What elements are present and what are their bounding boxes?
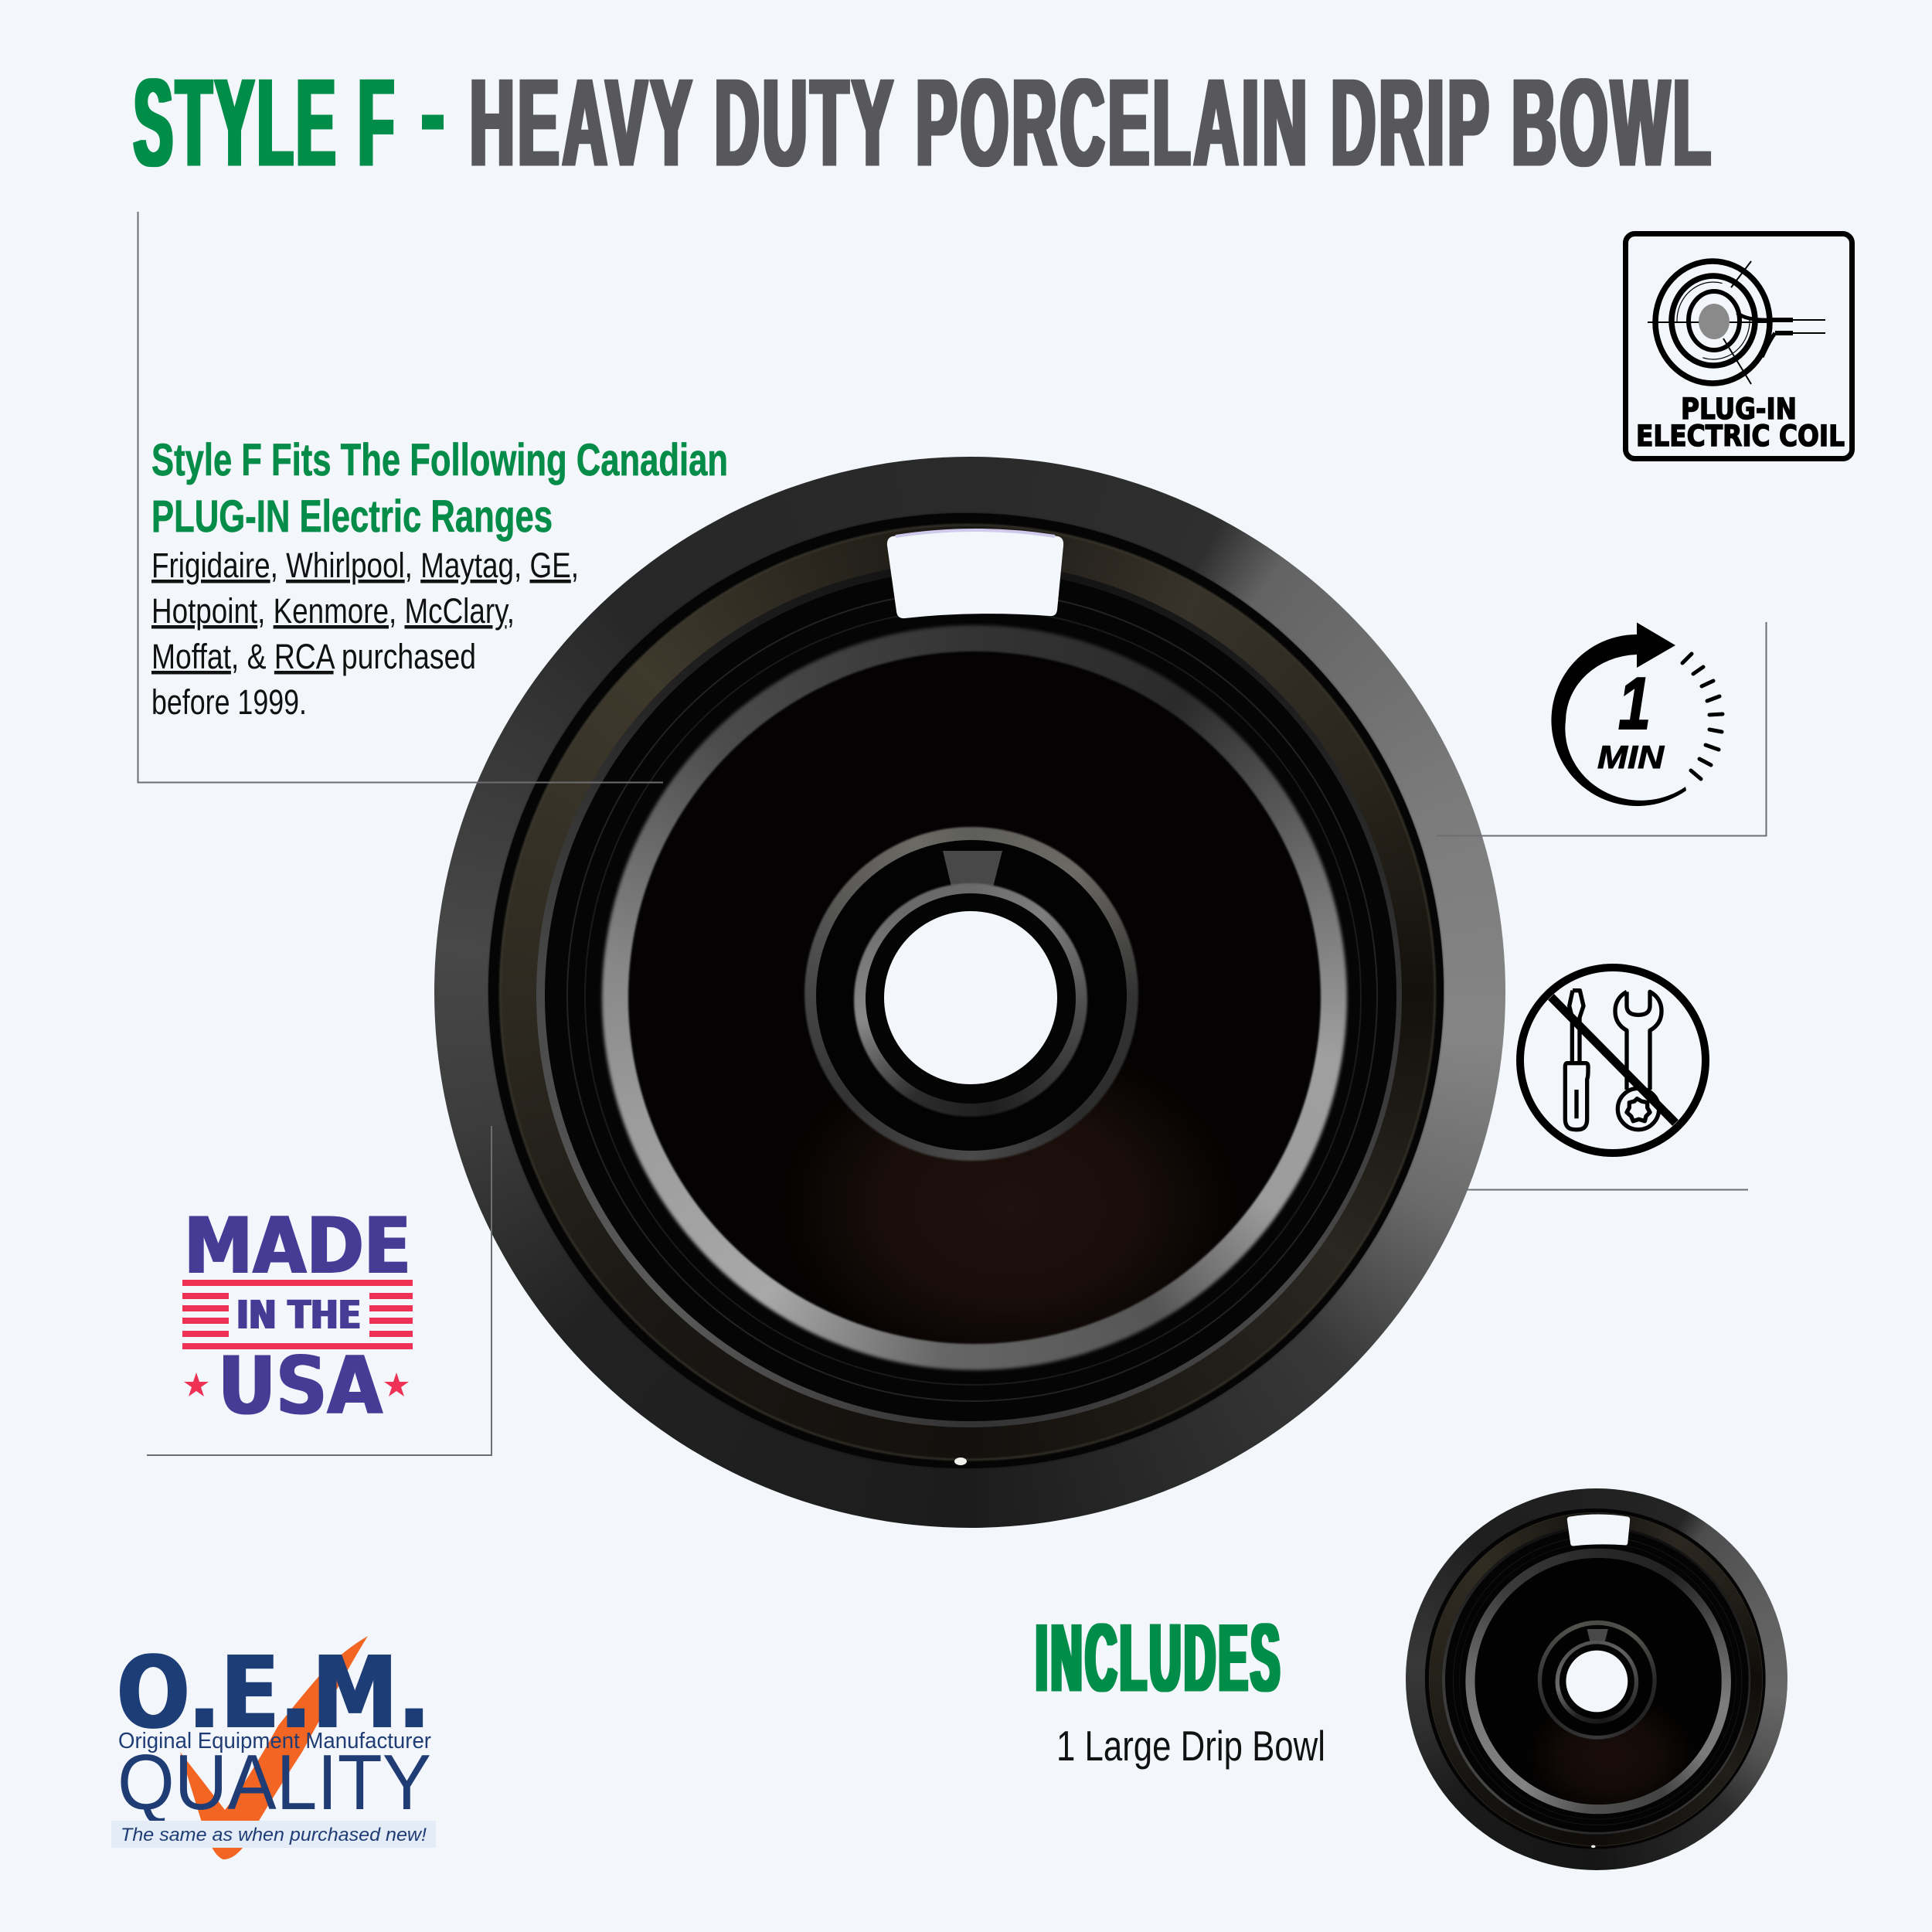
logo: O.E.M. quality: Original Equipment Manufacturer — [118, 1729, 431, 1753]
icon: 1 minute timer — [1551, 623, 1723, 806]
logo: O.E.M. quality: QUALITY — [117, 1740, 431, 1826]
callout line: no tools — [1419, 1189, 1748, 1190]
icon: plug-in electric coil badge: ELECTRIC COIL — [1636, 420, 1845, 453]
compatibility brand list: Hotpoint, Kenmore, McClary, — [151, 591, 515, 631]
icon: no tools required — [1520, 968, 1706, 1153]
overlay with text, icons and callout lines: INCLUDES — [1036, 1605, 1283, 1712]
icon: 1 minute timer: 1 — [1618, 662, 1651, 745]
compatibility heading — [151, 435, 728, 542]
logo: O.E.M. quality: The same as when purchased new! — [121, 1825, 427, 1845]
logo: made in the USA: IN THE — [236, 1293, 361, 1338]
logo: made in the USA: USA — [218, 1340, 383, 1433]
callout line: made in USA — [147, 1126, 492, 1455]
icon: plug-in electric coil badge: PLUG-IN — [1681, 393, 1797, 426]
callout line: compatibility — [138, 212, 663, 782]
title — [134, 53, 1714, 192]
logo: O.E.M. quality — [111, 1635, 436, 1859]
includes text: 1 Large Drip Bowl — [1056, 1722, 1325, 1770]
compatibility brand list: before 1999. — [151, 682, 307, 722]
logo: O.E.M. quality: O.E.M. — [117, 1635, 430, 1751]
logo: made in the USA: MADE — [184, 1200, 411, 1291]
product photo: large drip bowl — [434, 457, 1505, 1528]
icon: plug-in electric coil badge — [1626, 233, 1852, 459]
logo: made in the USA — [182, 1200, 413, 1433]
compatibility brand list — [151, 546, 579, 722]
callout line: one minute install — [1437, 622, 1767, 836]
icon: 1 minute timer: MIN — [1597, 739, 1665, 775]
product photo: small included drip bowl — [1406, 1488, 1787, 1870]
title: STYLE F — [134, 53, 397, 192]
compatibility brand list: Moffat, & RCA purchased — [151, 637, 476, 676]
compatibility heading: Style F Fits The Following Canadian — [151, 435, 728, 485]
compatibility brand list: Frigidaire, Whirlpool, Maytag, GE, — [151, 546, 579, 585]
compatibility heading: PLUG-IN Electric Ranges — [151, 492, 553, 542]
